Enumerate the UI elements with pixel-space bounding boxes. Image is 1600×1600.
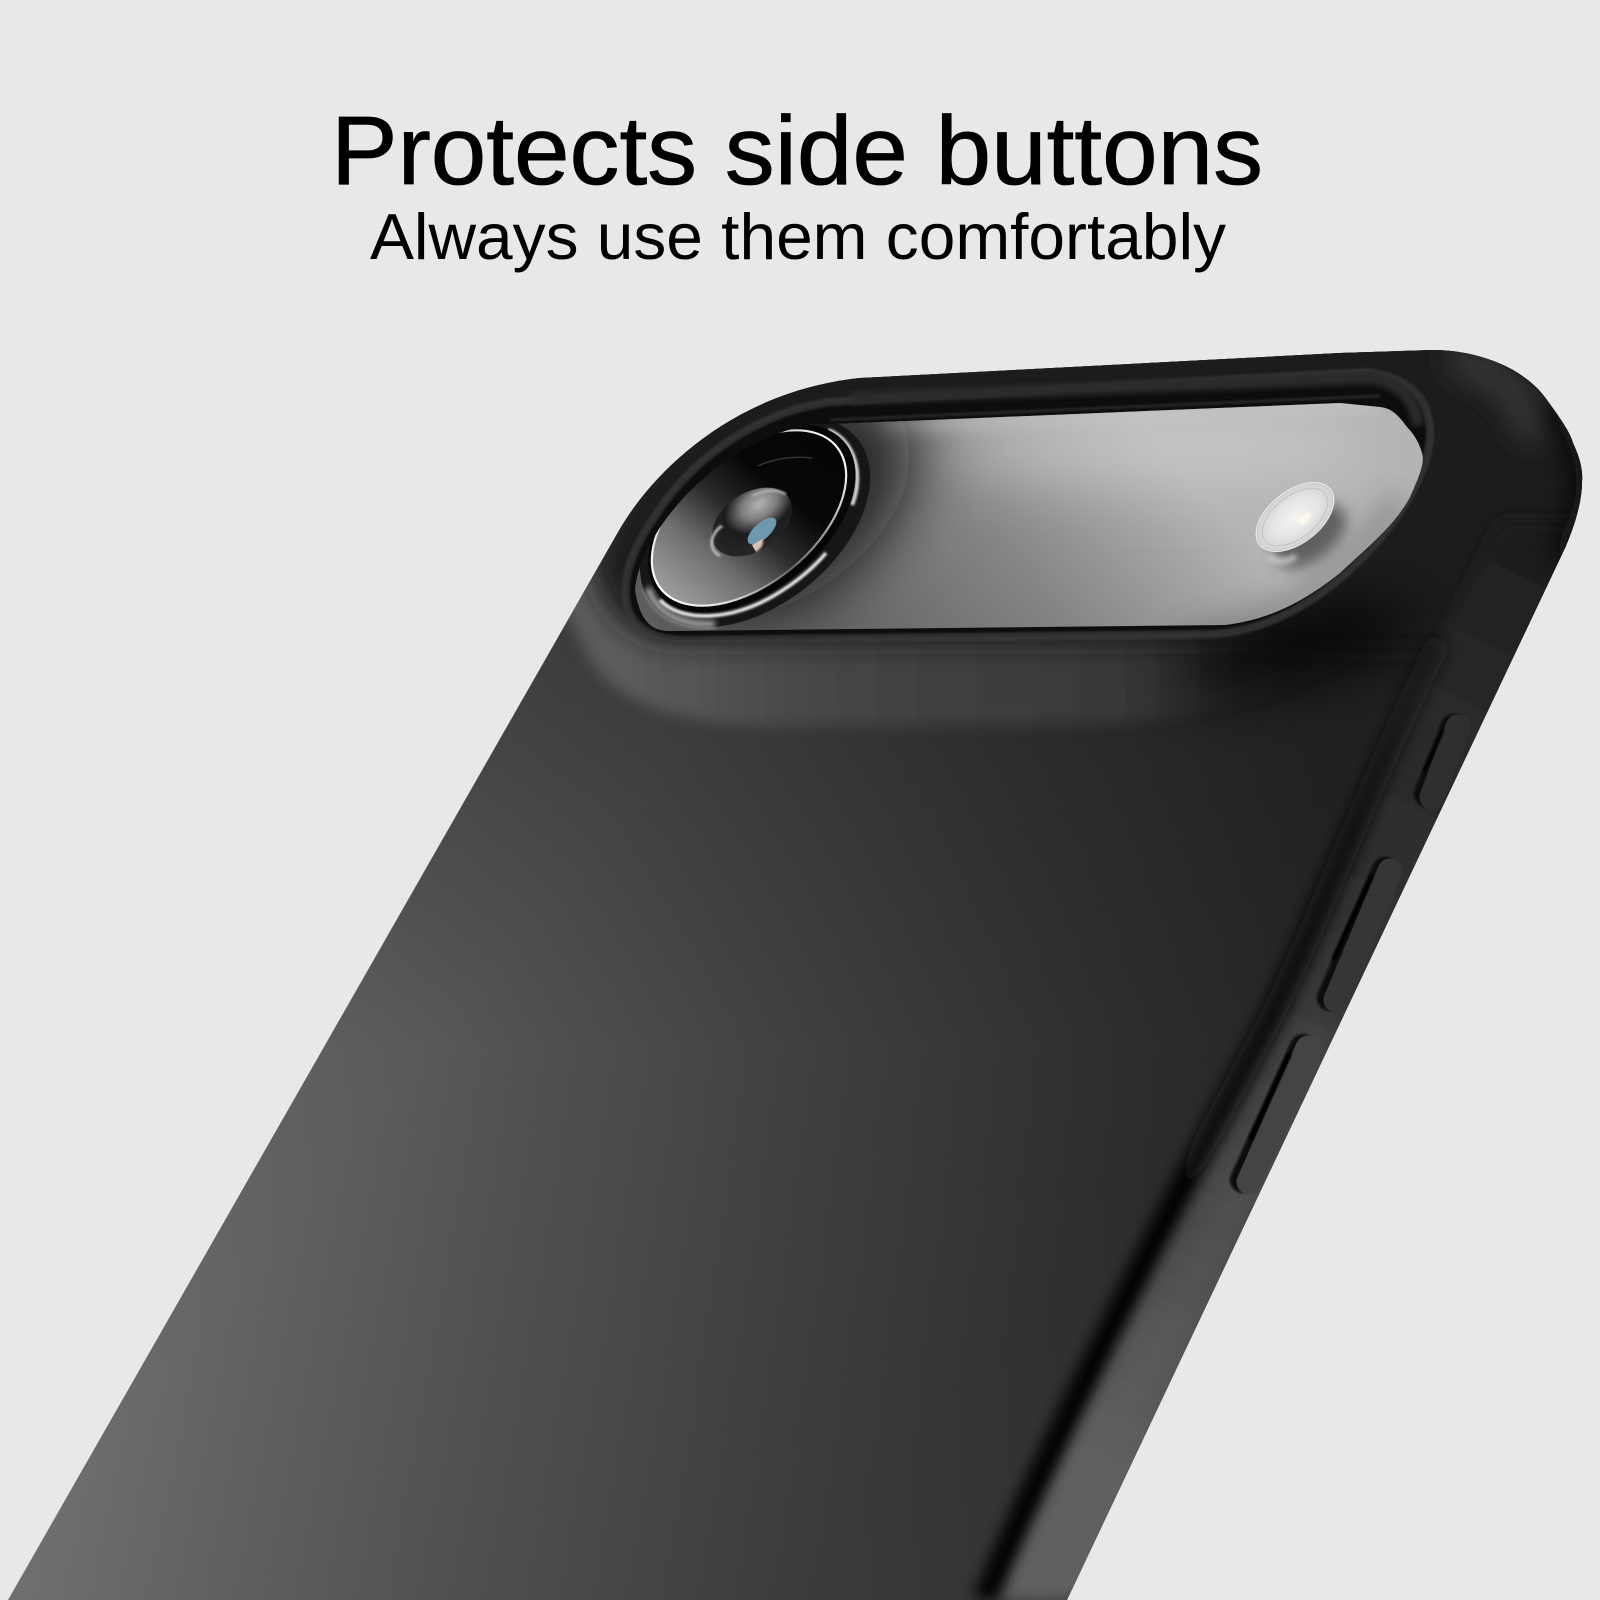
lens black bezel [648, 425, 856, 612]
lens shadow on plate [670, 420, 949, 630]
opening rim [626, 372, 1430, 640]
aperture top arc [752, 491, 786, 496]
plate top sheen [880, 405, 1380, 426]
lens outer highlight right [828, 430, 857, 505]
button one [1424, 727, 1458, 797]
lens outer metal ring [640, 424, 870, 627]
phone case [8, 350, 1582, 1600]
opening upper inner wall [850, 378, 1418, 425]
flash shadow [1266, 497, 1354, 576]
corner edge shadow [1555, 400, 1585, 560]
lens glass [650, 429, 848, 607]
flash body [1256, 482, 1334, 552]
right shoulder shadow [1170, 599, 1405, 710]
aperture left arc [712, 526, 722, 556]
side highlight band [1033, 1030, 1320, 1600]
plate highlight [950, 405, 1370, 485]
lens outer highlight lower [660, 553, 826, 616]
lower-left metal glint [648, 588, 715, 624]
lens aperture [709, 488, 792, 558]
aperture reflection blue [748, 518, 776, 544]
side wall of case [985, 520, 1600, 1600]
camera island shoulder [566, 350, 1558, 728]
lens inner faint arc [758, 457, 812, 466]
camera opening [626, 372, 1430, 640]
subtitle: Always use them comfortably [370, 200, 1226, 273]
dark crease between back and side [985, 640, 1440, 1600]
flash reflection [1268, 556, 1296, 561]
flash led [1298, 511, 1311, 526]
button two [1330, 870, 1390, 1000]
corner shoulder highlight [1450, 358, 1535, 440]
lens bezel and glass [648, 425, 856, 612]
aperture reflection pink [752, 538, 765, 553]
button three [1243, 1047, 1308, 1182]
plate lower-right shade [1180, 500, 1400, 640]
inner opening shelf line [830, 396, 1380, 420]
case back panel [8, 350, 1582, 1600]
upper case dark frame [590, 320, 1600, 648]
flash ring [1262, 488, 1328, 546]
flash [1256, 482, 1354, 576]
title: Protects side buttons [331, 96, 1263, 205]
camera plate [635, 403, 1423, 631]
